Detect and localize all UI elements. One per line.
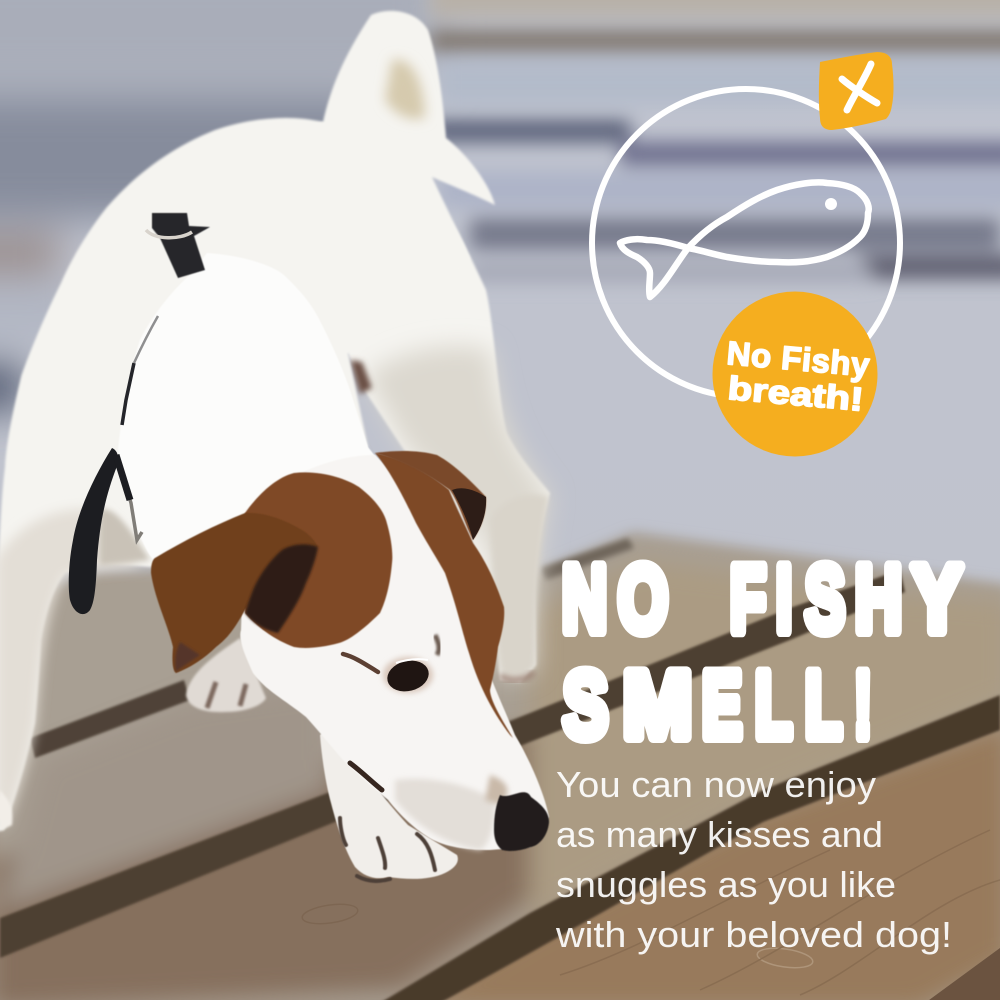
body text: snuggles as you like — [556, 864, 896, 905]
badge text — [725, 334, 872, 418]
fish outline — [620, 182, 869, 297]
plank surface tones — [0, 532, 1000, 1000]
heading: H — [855, 546, 902, 651]
dog — [0, 11, 550, 881]
body text — [555, 764, 952, 955]
heading: O — [618, 546, 668, 651]
heading: E — [702, 652, 742, 757]
hind paw — [500, 672, 534, 680]
eyebrow mark — [343, 654, 378, 672]
yellow badge circle — [712, 292, 878, 456]
heading: N — [562, 546, 607, 651]
tail shading — [385, 60, 425, 119]
graphic: circle with fish — [592, 52, 900, 456]
rear body and tail — [230, 11, 550, 682]
shoulder and near leg — [0, 118, 470, 832]
near ear — [151, 513, 318, 673]
fish eye — [825, 198, 837, 210]
near leg shading — [0, 509, 140, 825]
badge text: No Fishy — [725, 334, 872, 383]
back paw — [186, 638, 266, 712]
hind leg lower — [490, 495, 548, 680]
brown patch left — [245, 472, 392, 648]
heading: M — [623, 652, 692, 757]
badge text: breath! — [726, 369, 865, 418]
leash loop — [69, 448, 118, 614]
muzzle shading — [395, 779, 495, 850]
wood grain detail — [301, 830, 1000, 995]
heading: L — [755, 652, 792, 757]
body text: with your beloved dog! — [555, 914, 952, 955]
yellow x tag — [819, 52, 894, 130]
harness strap — [146, 213, 210, 278]
photo background: blurred water — [0, 0, 1000, 620]
deck corner — [925, 948, 1000, 1000]
big outline circle — [592, 89, 900, 397]
heading: S — [563, 652, 608, 757]
far ear — [375, 451, 486, 540]
body text: as many kisses and — [556, 814, 883, 855]
head white — [240, 455, 549, 850]
heading: ! — [854, 652, 872, 757]
mouth line — [350, 763, 382, 790]
heading: S — [805, 546, 845, 651]
heading: L — [805, 652, 842, 757]
eye — [383, 656, 433, 696]
heading: I — [776, 546, 792, 651]
brown stripe right — [375, 453, 513, 738]
harness cord upper — [134, 316, 158, 363]
front leg — [320, 720, 458, 879]
heading — [562, 546, 962, 757]
wooden deck — [0, 532, 1000, 1000]
x mark — [842, 64, 877, 110]
neck and chest — [118, 253, 390, 562]
dark spot under belly — [350, 360, 372, 394]
hind leg shading — [366, 346, 550, 680]
heading: F — [730, 546, 766, 651]
plank gaps — [30, 680, 190, 758]
leash clip — [117, 457, 142, 540]
ear shadow — [245, 544, 318, 633]
harness cord — [122, 363, 134, 425]
toes — [340, 818, 435, 881]
body text: You can now enjoy — [556, 764, 876, 805]
nose — [494, 792, 549, 851]
heading: Y — [912, 546, 962, 651]
